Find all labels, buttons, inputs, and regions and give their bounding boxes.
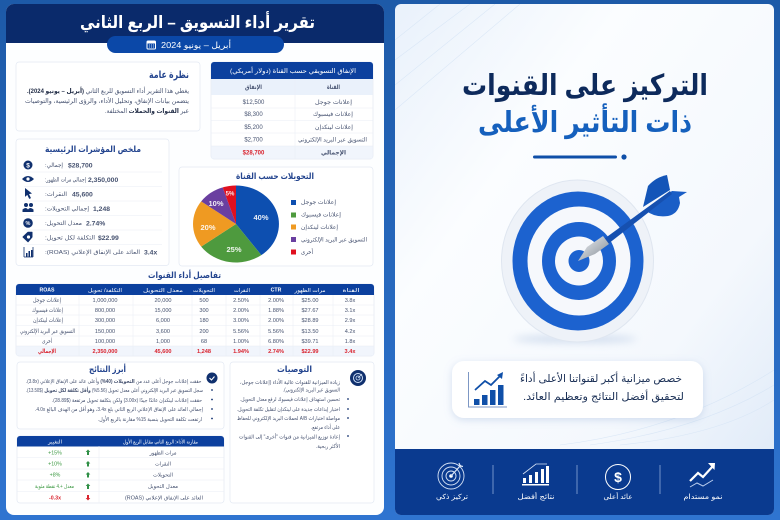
table: channel performance details <box>16 284 374 356</box>
row: google: 20,000 <box>154 298 172 304</box>
benefit: smart focus: تركيز ذكي <box>436 493 468 501</box>
row: other: 6.80% <box>268 339 284 345</box>
KPI: total spend: إجمالي: <box>45 163 63 169</box>
KPI: clicks: النقرات: <box>45 192 67 198</box>
table: spend by channel: إعلانات جوجل <box>315 99 352 106</box>
pie chart: 40% <box>253 213 269 222</box>
row: facebook <box>32 308 355 314</box>
benefit: sustainable growth: نمو مستدام <box>684 494 723 501</box>
pie chart: 5% <box>226 192 235 198</box>
row: total <box>38 349 356 355</box>
table: spend by channel: التسويق عبر البريد الإلكتروني <box>298 136 367 144</box>
icon: check badge <box>206 372 218 384</box>
table: Q2 vs Q1 comparison: +8% <box>50 472 61 478</box>
KPI: ROAS: العائد على الإنفاق الإعلاني (ROAS): <box>45 250 140 256</box>
table: Q2 vs Q1 comparison: -0.3x <box>49 496 61 502</box>
row: total: 2.74% <box>268 349 284 355</box>
panel: recommendations <box>230 362 374 503</box>
row: linkedin: 2.00% <box>268 318 284 324</box>
row: google: 500 <box>199 298 209 304</box>
KPI: impressions <box>22 176 118 184</box>
recommendations list: اختبار إبداعات جديدة على لينكدإن لتقليل تكلفة التحويل. <box>237 406 340 413</box>
row: total: 45,600 <box>154 349 172 355</box>
row: google: $25.00 <box>301 298 319 304</box>
table: Q2 vs Q1 comparison: التغيير <box>47 440 62 446</box>
row: email: 200 <box>199 329 209 335</box>
pie legend <box>291 200 367 256</box>
row: facebook: 2.00% <box>233 308 249 314</box>
table: spend by channel <box>211 62 373 159</box>
row: google: 1,000,000 <box>93 298 117 304</box>
heading: channel details: تفاصيل أداء القنوات <box>148 269 221 281</box>
row: linkedin: 300,000 <box>95 318 115 324</box>
table: Q2 vs Q1 comparison: مقارنة الأداء: الربع الثاني مقابل الربع الأول <box>123 438 198 446</box>
KPI: impressions: 2,350,000 <box>88 177 118 184</box>
overview text: عبر القنوات والحملات المختلفة. <box>105 108 189 115</box>
row: email: 5.56% <box>233 329 249 335</box>
icon: target with dart <box>502 175 687 343</box>
benefit: sustainable growth <box>684 463 723 501</box>
row: other: 100,000 <box>95 339 115 345</box>
overview text: يتضمن بيانات الإنفاق، وتحليل الأداء، والرؤى الرئيسية، والتوصيات <box>25 97 189 105</box>
table: spend by channel: إعلانات لينكدإن <box>315 124 353 131</box>
row: other: 1.00% <box>233 339 249 345</box>
KPI heading: ملخص المؤشرات الرئيسية <box>45 144 141 155</box>
table: channel performance details: CTR <box>271 288 282 294</box>
benefit: higher return: $ <box>614 469 622 485</box>
findings list: سجل التسويق عبر البريد الإلكتروني أعلى معدل تحويل (5.56%) وأقل تكلفة لكل تحويل ($13.50). <box>26 386 203 394</box>
callout: budget advice <box>452 361 703 418</box>
row: google: 2.50% <box>233 298 249 304</box>
table: spend by channel: الإجمالي <box>321 150 346 156</box>
findings list <box>26 377 213 423</box>
pie legend: أخرى <box>301 248 313 256</box>
panel: key findings <box>17 362 224 429</box>
table: spend by channel: $5,200 <box>244 125 263 131</box>
benefit: higher return <box>604 464 632 501</box>
table: channel performance details: مرات الظهور <box>293 288 326 294</box>
row: email: $13.50 <box>301 329 319 335</box>
row: other: أخرى <box>42 337 52 345</box>
table: spend by channel: $12,500 <box>243 100 265 106</box>
row: email: 150,000 <box>95 329 115 335</box>
report header band <box>6 4 384 43</box>
benefit: smart focus <box>436 463 468 501</box>
change arrows <box>86 450 90 500</box>
callout text: لتحقيق أفضل النتائج وتعظيم العائد. <box>523 389 684 403</box>
row: facebook: إعلانات فيسبوك <box>32 308 63 314</box>
table: spend by channel: $2,700 <box>244 138 263 144</box>
panel: marketing report <box>6 4 384 515</box>
KPI: conversions: 1,248 <box>93 206 110 213</box>
KPI: conversion rate: % <box>26 221 31 227</box>
row: email: 5.56% <box>268 329 284 335</box>
table: Q2 vs Q1 comparison: معدل التحويل <box>148 484 178 490</box>
KPI: total spend: $ <box>26 162 30 170</box>
table: Q2 vs Q1 comparison: +10% <box>48 462 62 468</box>
title divider <box>533 154 627 160</box>
pie legend: إعلانات فيسبوك <box>301 212 341 218</box>
KPI: cost per conversion <box>23 232 119 242</box>
table: Q2 vs Q1 comparison: العائد على الإنفاق الإعلاني (ROAS) <box>125 496 203 502</box>
KPI: total spend: $28,700 <box>68 162 93 170</box>
row: facebook: 1.88% <box>268 308 284 314</box>
KPI: total spend <box>24 160 93 170</box>
recommendations list: التسويق عبر البريد الإلكتروني). <box>283 386 340 394</box>
KPI: cost per conversion: التكلفة لكل تحويل: <box>45 234 95 242</box>
table: channel performance details: معدل التحويل <box>143 288 183 294</box>
row: facebook: 3.1x <box>345 308 355 314</box>
row: other <box>42 337 355 345</box>
KPI: conversion rate: معدل التحويل: <box>45 221 82 227</box>
KPI: ROAS <box>24 247 157 257</box>
panel: KPI summary <box>16 139 169 266</box>
row: google: 3.8x <box>345 298 355 304</box>
row: total: 1,248 <box>197 349 211 355</box>
table: Q2 vs Q1 comparison: التحويلات <box>153 472 173 478</box>
recommendations list: مواصلة اختبارات A/B لحملات البريد الإلكتروني للحفاظ <box>237 415 340 422</box>
row: total: 1.94% <box>233 349 249 355</box>
table: Q2 vs Q1 comparison: مرات الظهور <box>149 450 177 456</box>
row: linkedin <box>33 317 355 324</box>
row: email <box>20 328 355 335</box>
footer band <box>395 449 774 515</box>
panel: overview <box>16 62 200 131</box>
row: total: $22.99 <box>301 349 319 355</box>
focus title: التركيز على القنوات <box>462 70 708 102</box>
pie chart: 20% <box>200 223 216 232</box>
KPI: conversion rate <box>23 218 105 228</box>
benefit: better results: نتائج أفضل <box>518 492 555 501</box>
KPI: clicks: 45,600 <box>72 192 93 198</box>
icon: growth chart <box>468 372 507 407</box>
recommendations list <box>237 378 349 450</box>
row: total: 2,350,000 <box>93 349 117 355</box>
KPI: clicks <box>25 188 93 199</box>
date pill <box>107 36 284 53</box>
benefit: higher return: عائد أعلى <box>604 492 632 501</box>
row: google: إعلانات جوجل <box>33 298 61 304</box>
table: spend by channel: $28,700 <box>243 150 265 156</box>
row: facebook: 15,000 <box>154 308 172 314</box>
overview text: يغطي هذا التقرير أداء التسويق للربع الثاني (أبريل – يونيو 2024). <box>27 86 189 95</box>
callout text: خصص ميزانية أكبر لقنواتنا الأعلى أداءً <box>520 371 682 385</box>
table: channel performance details: التحويلات <box>193 288 215 294</box>
recommendations heading: التوصيات <box>277 364 312 375</box>
pie chart <box>193 186 279 262</box>
recommendations list: إعادة توزيع الميزانية من قنوات "أخرى" إلى القنوات <box>239 432 340 440</box>
benefit: better results <box>518 464 555 501</box>
findings heading: أبرز النتائج <box>89 363 126 375</box>
spend table title: الإنفاق التسويقي حسب القناة (دولار أمريكي) <box>230 66 356 75</box>
table: spend by channel: إعلانات فيسبوك <box>313 111 353 118</box>
row: linkedin: $28.89 <box>301 318 319 324</box>
pie chart: 10% <box>208 199 224 208</box>
focus title: ذات التأثير الأعلى <box>478 103 692 139</box>
row: linkedin: 3.00% <box>233 318 249 324</box>
focus title <box>462 70 708 139</box>
row: total: الإجمالي <box>38 349 56 355</box>
panel: conversions by channel <box>179 167 373 266</box>
dart <box>578 175 687 261</box>
pie legend: التسويق عبر البريد الإلكتروني <box>301 236 367 244</box>
table: spend by channel: $8,300 <box>244 112 263 118</box>
recommendations list: زيادة الميزانية للقنوات عالية الأداء (إعلانات جوجل، <box>240 378 340 386</box>
row: facebook: $27.67 <box>301 308 319 314</box>
overview text <box>25 86 189 115</box>
recommendations list: تحسين استهداف إعلانات فيسبوك لرفع معدل التحويل. <box>240 397 340 403</box>
row: other: 1,000 <box>156 339 170 345</box>
table: Q2 vs Q1 comparison <box>17 436 224 503</box>
icon: target badge <box>350 370 366 386</box>
row: email: 4.2x <box>345 329 355 335</box>
row: email: 3,600 <box>156 329 170 335</box>
KPI: conversion rate: 2.74% <box>86 220 105 228</box>
row: total: 3.4x <box>345 349 356 355</box>
row: linkedin: 6,000 <box>156 318 170 324</box>
row: email: التسويق عبر البريد الإلكتروني <box>20 328 75 335</box>
callout text <box>520 371 684 403</box>
row: facebook: 800,000 <box>95 308 115 314</box>
recommendations list: الأكثر ربحية. <box>316 442 340 450</box>
row: google <box>33 298 355 304</box>
findings list: حققت إعلانات لينكدإن عائدًا جيدًا (3.00x) ولكن بتكلفة تحويل مرتفعة ($28.89). <box>52 397 202 404</box>
panel: focus on top channels <box>395 4 774 515</box>
row: linkedin: 2.9x <box>345 318 355 324</box>
table: Q2 vs Q1 comparison: النقرات <box>155 462 171 468</box>
table: channel performance details: النقرات <box>234 288 250 294</box>
row: linkedin: 180 <box>199 318 209 324</box>
row: other: $39.71 <box>301 339 319 345</box>
findings list: ارتفعت تكلفة التحويل بنسبة 15% مقارنة بالربع الأول. <box>98 415 202 423</box>
KPI: ROAS: 3.4x <box>144 250 157 256</box>
findings list: إجمالي العائد على الإنفاق الإعلاني الربع الثاني بلغ 3.4x، وهو أقل من الهدف البالغ 4.0x. <box>35 405 203 413</box>
table: Q2 vs Q1 comparison: معدل +.4 نقطة مئوية <box>35 484 74 490</box>
row: linkedin: إعلانات لينكدإن <box>33 317 63 324</box>
findings list: حققت إعلانات جوجل أعلى عدد من التحويلات (40%) وأعلى عائد على الإنفاق الإعلاني (3.8x). <box>26 377 201 385</box>
pie legend: إعلانات جوجل <box>301 200 336 206</box>
pie legend: إعلانات لينكدإن <box>301 224 338 231</box>
table: channel performance details: القناة <box>342 288 360 294</box>
recommendations list: على أداء مرتفع. <box>311 423 340 431</box>
table: Q2 vs Q1 comparison: +15% <box>48 450 62 456</box>
overview heading: نظرة عامة <box>149 70 189 81</box>
row: other: 1.8x <box>345 339 355 345</box>
table: spend by channel: القناة <box>327 84 340 91</box>
row: other: 68 <box>201 339 207 345</box>
KPI: conversions: إجمالي التحويلات: <box>45 206 89 212</box>
pie chart: 25% <box>226 245 242 254</box>
KPI: conversions <box>22 203 110 213</box>
row: facebook: 300 <box>199 308 209 314</box>
report title: تقرير أداء التسويق – الربع الثاني <box>80 11 315 33</box>
KPI: impressions: إجمالي مرات الظهور: <box>45 178 86 184</box>
table: channel performance details: التكلفة/ تحويل <box>88 288 122 294</box>
KPI: cost per conversion: $22.99 <box>98 235 119 242</box>
row: google: 2.00% <box>268 298 284 304</box>
table: spend by channel: الإنفاق <box>245 84 262 91</box>
table: channel performance details: ROAS <box>40 288 55 294</box>
date pill: أبريل – يونيو 2024 <box>161 39 231 50</box>
pie heading: التحويلات حسب القناة <box>236 171 314 182</box>
